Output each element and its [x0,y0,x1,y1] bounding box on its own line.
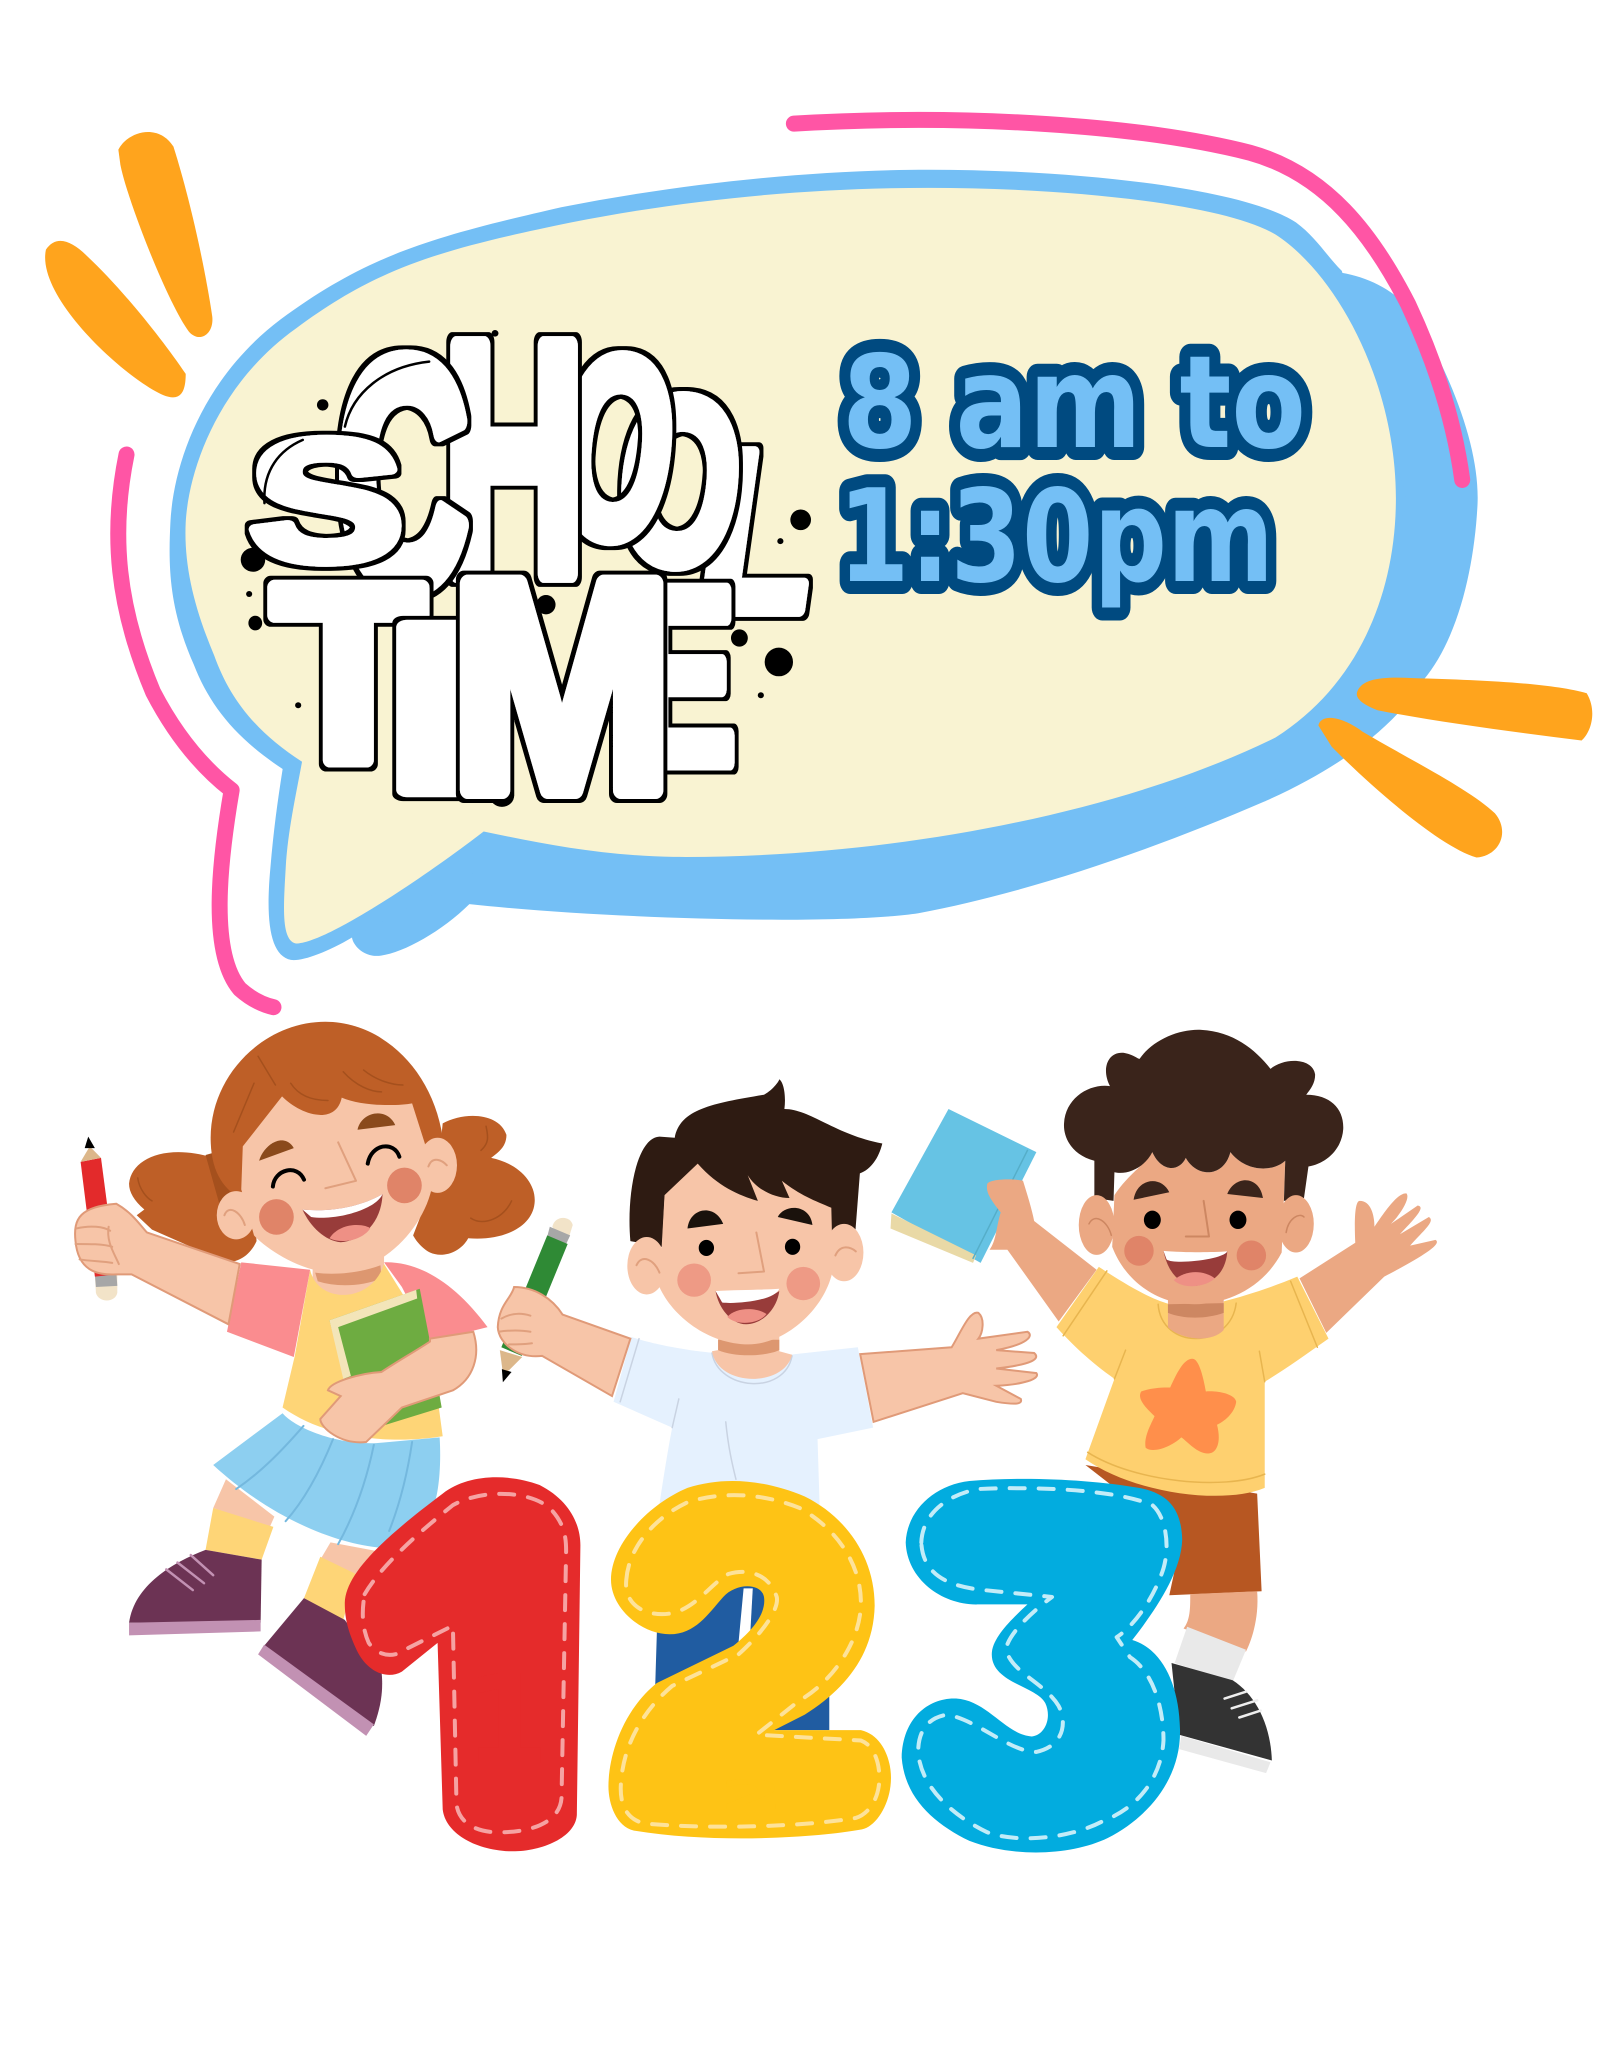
t-shirt [614,1337,873,1505]
school time lettering: I [383,575,483,841]
eyes [699,1240,714,1256]
boy's right arm [860,1313,1037,1422]
school time lettering: E [630,536,736,817]
school time lettering: H [443,274,585,643]
hair buns [129,1152,257,1262]
hair [211,1022,443,1201]
left arm [75,1204,240,1324]
neck [313,1253,384,1301]
neck [712,1333,792,1379]
school hours text [838,329,1306,612]
neck [1168,1298,1224,1339]
number 2 [608,1481,891,1838]
mouth [716,1291,779,1324]
speech bubble [170,170,1478,960]
green pencil [552,1218,573,1236]
number 3 [902,1479,1182,1852]
boy with blue book [891,1030,1437,1773]
left shoe [129,1550,262,1623]
leg [1184,1591,1258,1651]
number 1: 1 [464,1650,549,1794]
nose [738,1232,764,1273]
left ear [217,1191,256,1239]
left arm [987,1179,1097,1321]
face [659,1164,833,1344]
right arm [1300,1193,1437,1333]
star [1140,1359,1236,1453]
school hours text: 1:30pm [838,463,1274,612]
eyebrows [259,1113,395,1161]
school time lettering [241,274,834,854]
pink accent lines [118,120,1462,1007]
skirt [213,1413,440,1548]
school hours text: 8 am to [842,329,1306,478]
pink sleeves [227,1262,488,1357]
girl with pencil and green book [75,1022,535,1736]
mouth [302,1194,383,1242]
neck shadow [315,1265,382,1285]
socks [206,1508,356,1620]
legs [213,1479,376,1574]
number 3: 3 [1081,1510,1126,1591]
hugging arm [320,1332,476,1442]
number 1 [345,1477,580,1851]
nose [1186,1201,1209,1236]
shorts [1085,1465,1262,1595]
school time lettering: C [337,292,468,655]
bubble shadow [306,271,1478,956]
ears [1079,1195,1114,1255]
red pencil [95,1274,117,1300]
decorative ink dots [241,330,811,807]
shoe [1172,1663,1272,1761]
cheeks [1124,1236,1154,1266]
boy with green pencil [498,1079,882,1730]
eyes [273,1146,399,1187]
bubble fill [185,188,1396,944]
school time lettering: M [450,519,673,854]
face [1112,1152,1285,1304]
yellow t-shirt [1056,1267,1329,1496]
school time lettering: O [546,301,687,597]
face [241,1096,431,1273]
green book [329,1289,442,1428]
eyebrows [688,1208,812,1228]
sock [1175,1627,1246,1682]
lettering highlights [264,362,429,503]
cheeks [677,1263,711,1297]
ears [627,1237,666,1294]
left arm [498,1287,630,1396]
school time lettering: S [249,405,404,597]
cheeks [259,1168,422,1235]
number 2: 2 [719,1771,783,1819]
hair [630,1079,882,1247]
nose [325,1142,356,1188]
bubble outline [170,170,1408,960]
right ear [418,1138,457,1193]
school time lettering: T [272,534,425,814]
eyes [1144,1211,1161,1229]
blue book [891,1109,1036,1263]
trousers [654,1580,829,1730]
right shoe [264,1598,382,1726]
eyebrows [1134,1180,1263,1200]
school time lettering: L [686,404,834,659]
shirt [283,1264,443,1440]
hair [1064,1030,1343,1201]
orange bursts [45,132,1592,857]
mouth [1163,1251,1227,1286]
school time lettering: O [607,345,753,619]
